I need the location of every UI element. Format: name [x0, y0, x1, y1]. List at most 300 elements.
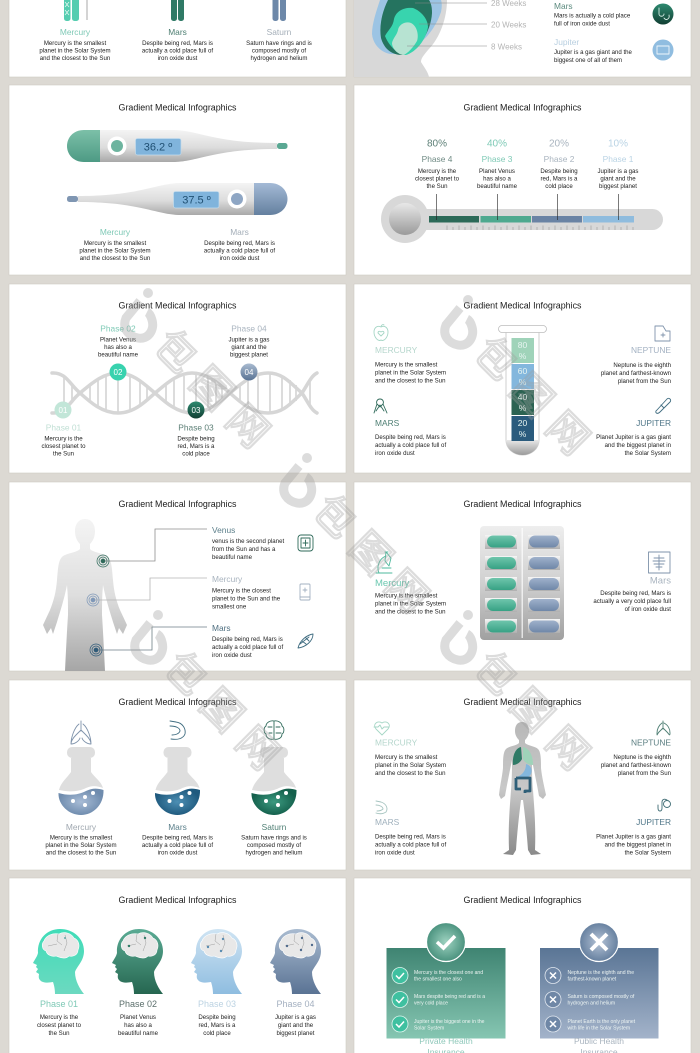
week pointers: [407, 3, 487, 46]
phase 3: [477, 138, 518, 190]
text: mars: Mars: [212, 623, 231, 633]
phase 4: Mercury is the: [418, 168, 457, 175]
text: mars: iron oxide dust: [375, 850, 415, 856]
watermark: row three left: 包: [155, 644, 215, 704]
text: mercury: and the closest to the Sun: [375, 770, 445, 777]
thermometer gauge: [381, 194, 663, 243]
text: mars: MARS: [375, 817, 400, 827]
text: phase 03: Despite being: [198, 1014, 236, 1021]
text: phase 03: Phase 03: [198, 999, 236, 1009]
text: phase 02: beautiful name: [98, 352, 139, 358]
watermark: row three left: 图: [191, 681, 251, 741]
phase 1: Phase 1: [603, 154, 634, 164]
text: jupiter: the Solar System: [625, 850, 671, 856]
text: phase 03: [198, 999, 236, 1037]
text: neptune: planet and farthest-known: [601, 762, 671, 769]
icon: phone: [300, 584, 310, 600]
text: mercury: [79, 227, 151, 262]
test tube: %: [519, 429, 527, 439]
text: mercury: planet in the Solar System: [79, 248, 151, 254]
text: mars: Despite being red, Mars is: [204, 240, 275, 247]
test tube: %: [519, 403, 527, 413]
text: jupiter: [596, 817, 671, 856]
watermark: row one right: 包: [465, 329, 525, 389]
text: mars: iron oxide dust: [220, 255, 260, 262]
phase 2: 20%: [549, 138, 569, 150]
phase 4: closest planet to: [415, 176, 460, 182]
card: public health: with life in the Solar System: [568, 1026, 630, 1032]
text: phase 04: biggest planet: [277, 1030, 315, 1037]
test tube: [498, 326, 546, 455]
text: phase 03: Phase 03: [178, 422, 214, 432]
watermark: row one left: 图: [181, 359, 241, 419]
watermark: row two center: 图: [340, 524, 400, 584]
head 4: [270, 929, 321, 994]
text: mercury: planet to the Sun and the: [212, 596, 281, 602]
thermometer 37.5: [67, 183, 288, 215]
text: neptune: [601, 345, 671, 385]
flask: saturn: [251, 747, 297, 815]
text: mars: [142, 822, 213, 856]
text: phase 04: giant and the: [231, 344, 267, 351]
icon: mercury bars: [64, 0, 88, 21]
thermometer 36.2: [67, 130, 288, 162]
text: mercury: [375, 578, 446, 616]
phase 1: Jupiter is a gas: [598, 168, 638, 175]
text: mars: [212, 623, 283, 659]
icon: apple: [374, 325, 388, 340]
icon: stomach: [376, 801, 387, 814]
title: Gradient Medical Infographics: [119, 499, 237, 509]
text: phase 04: [229, 324, 269, 358]
text: mercury: and the closest to the Sun: [80, 255, 150, 262]
phase 1: biggest planet: [599, 183, 637, 190]
watermark: row one right: 网: [537, 404, 597, 464]
text: mars: actually a very cold place full: [593, 598, 671, 605]
watermark: row one right: 图: [501, 366, 561, 426]
text: phase 02: Planet Venus: [100, 336, 136, 344]
text: phase 02: has also a: [104, 344, 132, 351]
node 04: 04: [245, 368, 254, 377]
text: jupiter: and the biggest planet in: [605, 842, 671, 848]
text: phase 01: [41, 422, 86, 458]
text: mercury: [375, 345, 446, 384]
text: mercury: Mercury is the smallest: [50, 834, 112, 842]
week labels: 8 Weeks: [491, 42, 522, 52]
text: phase 04: Phase 04: [231, 324, 267, 334]
text: neptune: Neptune is the eighth: [613, 754, 671, 761]
text: phase 01: [37, 999, 82, 1037]
text: mercury: smallest one: [212, 604, 247, 610]
text: mars: Despite being red, Mars is: [375, 434, 446, 441]
card: private health: Solar System: [414, 1026, 444, 1032]
connector lines: [93, 529, 207, 650]
text: mars: Mars is actually a cold place: [554, 12, 631, 20]
text: neptune: planet from the Sun: [618, 770, 671, 777]
text: mercury: planet in the Solar System: [45, 842, 117, 849]
text: mars: Mars: [230, 227, 249, 237]
text: phase 01: closest planet to: [41, 443, 86, 450]
text: phase 04: [275, 999, 316, 1037]
text: phase 03: cold place: [203, 1030, 231, 1037]
label: private health insurance: [419, 1036, 473, 1053]
text: neptune: Neptune is the eighth: [613, 362, 671, 369]
text: phase 01: the Sun: [53, 450, 74, 458]
panel: insurance comparison: [354, 878, 691, 1053]
icon: heart: [374, 722, 389, 735]
text: mars: [375, 418, 446, 457]
icon: microscope: [376, 552, 392, 573]
text: phase 02: Phase 02: [119, 999, 157, 1009]
text: mercury: MERCURY: [375, 738, 418, 748]
phase 2: [540, 138, 578, 190]
panel: dna phases: [9, 284, 346, 473]
icon: lungs: [657, 721, 670, 735]
text: saturn: composed mostly of: [247, 842, 301, 849]
text: mercury: [212, 574, 281, 610]
text: mars: Despite being red, Mars is: [142, 834, 213, 842]
test tube: 40: [518, 392, 527, 402]
phase 2: red, Mars is a: [541, 176, 578, 182]
thermometer 37.5: 37.5 º: [182, 194, 211, 206]
text: mercury: planet in the Solar System: [39, 48, 111, 54]
label: public health insurance: Public Health: [574, 1036, 624, 1046]
text: mars: actually a cold place full of: [375, 842, 446, 848]
text: venus: Venus: [212, 525, 235, 535]
phase 2: cold place: [545, 183, 573, 190]
text: venus: from the Sun and has a: [212, 546, 276, 553]
icon: saturn bars: [272, 0, 286, 21]
human silhouette: [43, 519, 127, 671]
node 03: 03: [192, 406, 201, 415]
text: jupiter: Planet Jupiter is a gas giant: [596, 834, 671, 840]
phase 4: Phase 4: [422, 154, 453, 164]
text: mercury: Mercury is the smallest: [84, 240, 146, 247]
head 2: [112, 929, 163, 994]
text: saturn: [246, 27, 312, 62]
head 1: [33, 929, 84, 994]
text: phase 02: has also a: [124, 1022, 152, 1029]
text: mars: Mars: [554, 1, 573, 11]
title: Gradient Medical Infographics: [464, 499, 582, 509]
test tube: %: [519, 351, 527, 361]
text: mercury: and the closest to the Sun: [375, 378, 445, 384]
icon: ribbon: [374, 399, 387, 413]
text: mars: [554, 1, 631, 28]
panel: thermometer phases: [354, 85, 691, 275]
text: mercury: Mercury: [212, 574, 243, 584]
text: jupiter: the Solar System: [625, 450, 671, 457]
phase 4: [415, 138, 460, 190]
node 02: [110, 364, 126, 380]
text: phase 04: Jupiter is a gas: [229, 336, 269, 344]
watermark: row three right: [445, 610, 597, 779]
text: phase 01: Phase 01: [46, 422, 82, 432]
fetus diagram: [354, 0, 447, 77]
text: jupiter: JUPITER: [636, 418, 671, 428]
text: jupiter: and the biggest planet in: [605, 442, 671, 449]
text: mars: actually a cold place full of: [375, 442, 446, 449]
watermark: row three left: 网: [227, 719, 287, 779]
text: mercury: Mercury is the closest: [212, 588, 271, 594]
text: mercury: and the closest to the Sun: [40, 55, 110, 62]
phase 1: [598, 138, 638, 190]
text: mercury: Mercury: [375, 578, 410, 589]
icon: x-ray: [648, 552, 670, 573]
label: public health insurance: [574, 1036, 624, 1053]
card: private health: Jupiter is the biggest one in the: [414, 1019, 485, 1025]
node 02: 02: [114, 368, 123, 377]
text: mercury: planet in the Solar System: [375, 370, 446, 376]
watermark: row three left: [135, 610, 287, 779]
icon: blue badge: [652, 40, 674, 60]
phase 1: giant and the: [600, 176, 636, 182]
text: mars: iron oxide dust: [158, 850, 198, 856]
icon: mars bars: [171, 0, 184, 21]
text: phase 02: Planet Venus: [120, 1014, 156, 1021]
test tube: 20: [518, 418, 527, 428]
text: mars: actually a cold place full of: [142, 48, 213, 54]
text: saturn: Saturn have rings and is: [246, 40, 312, 47]
text: mars: of iron oxide dust: [625, 606, 671, 613]
text: mars: Mars: [650, 576, 671, 586]
card: private health: [386, 922, 506, 1038]
text: phase 03: cold place: [182, 450, 210, 458]
text: venus: [212, 525, 284, 561]
text: neptune: planet from the Sun: [618, 378, 671, 385]
panel: thermometers: [9, 85, 346, 275]
human body with organs: [499, 722, 546, 855]
text: mercury: planet in the Solar System: [375, 600, 446, 608]
phase 4: the Sun: [426, 183, 448, 190]
text: saturn: [241, 822, 307, 856]
card: private health: very cold place: [414, 1000, 448, 1006]
node 01: 01: [59, 406, 68, 415]
watermark: row one left: [125, 288, 277, 457]
thermometer 36.2: 36.2 º: [144, 142, 172, 154]
watermark: row one left: 网: [217, 397, 277, 457]
test tube: %: [519, 377, 527, 387]
text: mars: Despite being red, Mars is: [375, 834, 446, 840]
icon: stomach: [170, 721, 185, 739]
phase 3: Phase 3: [482, 154, 513, 164]
phase 2: Phase 2: [544, 154, 575, 164]
text: phase 03: [177, 422, 215, 458]
title: Gradient Medical Infographics: [119, 300, 237, 310]
text: mercury: and the closest to the Sun: [46, 850, 116, 856]
text: mars: [204, 227, 275, 262]
card: public health: Saturn is composed mostly of: [568, 994, 635, 1000]
head 3: [191, 929, 242, 994]
text: phase 02: beautiful name: [118, 1030, 159, 1037]
text: phase 03: Despite being: [177, 436, 215, 442]
watermark: row two center: [284, 453, 436, 622]
text: mars: Despite being red, Mars is: [600, 590, 671, 597]
text: phase 01: Mercury is the: [44, 436, 83, 442]
target: navy: [90, 644, 102, 656]
text: phase 04: Jupiter is a gas: [275, 1014, 316, 1021]
blister pack: [480, 526, 564, 640]
watermark: row two center: 包: [304, 487, 364, 547]
phase 3: 40%: [487, 138, 507, 150]
text: mercury: and the closest to the Sun: [375, 608, 445, 616]
text: saturn: Saturn: [267, 27, 292, 37]
card: private health: Mercury is the closest one and: [414, 970, 483, 976]
week labels: [491, 0, 526, 52]
title: Gradient Medical Infographics: [464, 300, 582, 310]
text: mars: [142, 27, 213, 62]
card: public health: Planet Earth is the only planet: [568, 1019, 636, 1025]
text: mercury: Mercury is the smallest: [375, 592, 438, 600]
text: mars: actually a cold place full of: [212, 644, 283, 651]
title: Gradient Medical Infographics: [464, 102, 582, 112]
text: saturn: hydrogen and helium: [251, 55, 307, 62]
text: saturn: Saturn: [262, 822, 287, 832]
text: jupiter: Jupiter is a gas giant and the: [554, 49, 633, 56]
target: green: [97, 555, 109, 567]
text: phase 01: closest planet to: [37, 1022, 82, 1029]
phase 1: 10%: [608, 138, 628, 150]
icon: stethoscope: [658, 799, 670, 811]
node 01: [54, 402, 72, 418]
label: private health insurance: Private Health: [419, 1036, 473, 1046]
icon: thermometer: [656, 398, 671, 413]
text: neptune: [601, 738, 671, 777]
text: mercury: [45, 822, 117, 856]
text: mercury: planet in the Solar System: [375, 762, 446, 769]
week labels: 20 Weeks: [491, 20, 526, 30]
watermark: row three right: 网: [537, 719, 597, 779]
card: public health: hydrogen and helium: [568, 1000, 615, 1006]
title: Gradient Medical Infographics: [119, 697, 237, 707]
text: mars: [375, 817, 446, 856]
text: jupiter: Jupiter: [554, 37, 579, 47]
title: Gradient Medical Infographics: [119, 102, 237, 112]
title: Gradient Medical Infographics: [464, 697, 582, 707]
text: mercury: Mercury: [60, 27, 91, 37]
text: mars: iron oxide dust: [375, 450, 415, 457]
text: neptune: NEPTUNE: [631, 345, 671, 355]
card: public health: [540, 922, 658, 1038]
text: phase 04: giant and the: [278, 1022, 314, 1029]
text: mars: actually a cold place full of: [204, 248, 275, 254]
text: phase 01: the Sun: [48, 1030, 70, 1037]
target: slate: [87, 594, 99, 606]
text: venus: beautiful name: [212, 554, 253, 561]
phase 2: Despite being: [540, 168, 578, 175]
text: phase 03: red, Mars is a: [199, 1022, 236, 1029]
watermark: row three right: 包: [465, 644, 525, 704]
text: phase 02: [98, 324, 139, 358]
test tube: 60: [518, 366, 527, 376]
text: phase 02: Phase 02: [100, 324, 136, 334]
text: jupiter: [596, 418, 671, 457]
text: jupiter: [554, 37, 633, 64]
watermark: row two center: 网: [376, 562, 436, 622]
text: phase 02: [118, 999, 159, 1037]
text: neptune: planet and farthest-known: [601, 370, 671, 377]
text: mercury: Mercury is the smallest: [375, 362, 438, 368]
text: mercury: Mercury is the smallest: [44, 40, 106, 47]
flask: mars: [155, 747, 200, 815]
text: phase 04: biggest planet: [230, 352, 268, 358]
text: phase 01: Phase 01: [40, 999, 78, 1009]
text: mars: full of iron oxide dust: [554, 20, 610, 28]
panel: top-right fetus stages: [354, 0, 691, 77]
icon: stethoscope badge: [652, 4, 674, 24]
text: mars: Mars: [168, 822, 187, 832]
watermark: row one right: [445, 295, 597, 464]
card: private health: the smallest one also: [414, 976, 462, 982]
text: saturn: hydrogen and helium: [246, 850, 302, 856]
text: phase 03: red, Mars is a: [178, 443, 215, 450]
text: mercury: Mercury is the smallest: [375, 754, 438, 761]
text: mars: iron oxide dust: [158, 55, 198, 62]
text: mars: Despite being red, Mars is: [212, 636, 283, 643]
icon: dna: [298, 634, 313, 648]
dna helix: [52, 373, 317, 413]
icon: folder plus: [655, 326, 670, 341]
phase 3: Planet Venus: [479, 168, 515, 175]
icon: book: [298, 535, 313, 551]
title: Gradient Medical Infographics: [464, 895, 582, 905]
phase 3: has also a: [483, 176, 511, 182]
text: mercury: Mercury: [100, 227, 131, 237]
card: public health: Neptune is the eighth and the: [568, 970, 634, 976]
text: mercury: MERCURY: [375, 345, 418, 355]
card: private health: Mars despite being red and is a: [414, 994, 485, 1000]
text: phase 04: Phase 04: [276, 999, 315, 1009]
text: mars: actually a cold place full of: [142, 842, 213, 849]
panel: test tube: [354, 284, 691, 473]
text: jupiter: biggest one of all of them: [554, 57, 622, 64]
flask: mercury: [58, 747, 104, 815]
text: mars: Despite being red, Mars is: [142, 40, 213, 47]
phase 3: beautiful name: [477, 183, 518, 190]
text: jupiter: Planet Jupiter is a gas giant: [596, 434, 671, 441]
panel: human body targets: [9, 482, 346, 671]
text: mars: Mars: [168, 27, 187, 37]
text: mars: [593, 576, 671, 613]
icon: lungs: [71, 721, 91, 744]
text: mars: MARS: [375, 418, 400, 428]
text: saturn: Saturn have rings and is: [241, 834, 307, 842]
watermark: row three right: 图: [501, 681, 561, 741]
text: mercury: [375, 738, 446, 777]
node 03: [188, 402, 204, 418]
panel: pill pack: [354, 482, 691, 671]
phase 4: 80%: [427, 138, 447, 150]
panel: heads: [9, 878, 346, 1053]
text: phase 01: Mercury is the: [40, 1014, 79, 1021]
text: saturn: composed mostly of: [252, 48, 306, 54]
text: mercury: Mercury: [66, 822, 97, 832]
node 04: [240, 364, 258, 380]
panel: body organs: [354, 680, 691, 870]
test tube: 80: [518, 340, 527, 350]
title: Gradient Medical Infographics: [119, 895, 237, 905]
text: neptune: NEPTUNE: [631, 738, 671, 748]
watermark: row one left: 包: [145, 322, 205, 382]
text: venus: venus is the second planet: [212, 538, 284, 545]
text: mars: iron oxide dust: [212, 652, 252, 659]
panel: flasks: [9, 680, 346, 870]
icon: brain: [264, 721, 284, 739]
panel: top-left cropped three columns: [9, 0, 346, 77]
card: public health: farthest-known planet: [568, 976, 617, 982]
text: mercury: [39, 27, 111, 62]
text: jupiter: JUPITER: [636, 817, 671, 827]
